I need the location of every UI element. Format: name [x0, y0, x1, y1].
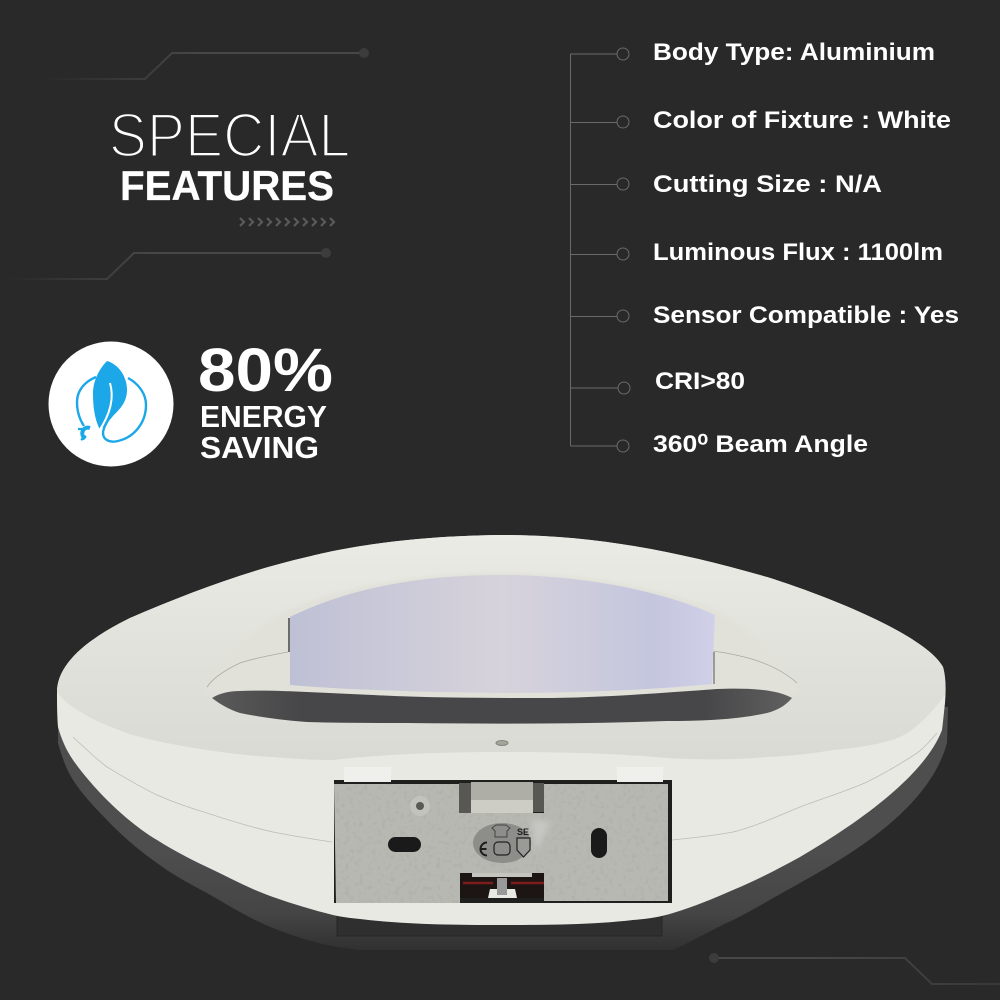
circuit line: bottom right	[709, 953, 1000, 984]
lamp light diffuser	[290, 575, 715, 693]
lamp fixture	[57, 535, 948, 950]
specification list: CRI>80	[655, 368, 745, 395]
chevron row	[240, 218, 334, 226]
lamp body top face	[57, 535, 945, 760]
specification list	[653, 39, 959, 458]
energy saving stat	[198, 336, 333, 465]
energy saving stat: SAVING	[200, 431, 319, 465]
lamp inner recess	[205, 573, 800, 706]
specification list: Sensor Compatible : Yes	[653, 302, 959, 329]
circuit line: top left	[50, 48, 369, 79]
specification connector lines	[570, 48, 630, 452]
lamp screw	[496, 740, 508, 746]
certification label: SE	[517, 827, 529, 837]
mounting cutout	[334, 780, 672, 903]
lamp body front band	[57, 535, 946, 925]
specification list: Color of Fixture : White	[653, 107, 951, 134]
lamp dark slot	[212, 689, 792, 724]
icon: leaf and plug in white circle	[48, 342, 174, 466]
title	[109, 101, 350, 209]
lamp seams	[73, 733, 937, 842]
circuit line: lower left	[10, 248, 331, 279]
specification list: Luminous Flux : 1100lm	[653, 239, 943, 266]
metal mounting plate	[334, 782, 668, 903]
energy saving stat: 80%	[198, 336, 333, 404]
title: FEATURES	[120, 162, 334, 209]
certification label	[473, 823, 531, 863]
specification list: 360⁰ Beam Angle	[653, 431, 868, 458]
wires and bottom notch	[460, 873, 544, 898]
title: SPECIAL	[109, 101, 350, 170]
specification list: Body Type: Aluminium	[653, 39, 935, 66]
mounting clips	[344, 767, 663, 782]
lamp reflection shadow	[58, 707, 948, 950]
specification list: Cutting Size : N/A	[653, 171, 882, 198]
mounting holes	[388, 796, 607, 858]
mounting box under lamp	[337, 915, 662, 936]
energy saving stat: ENERGY	[200, 400, 327, 434]
